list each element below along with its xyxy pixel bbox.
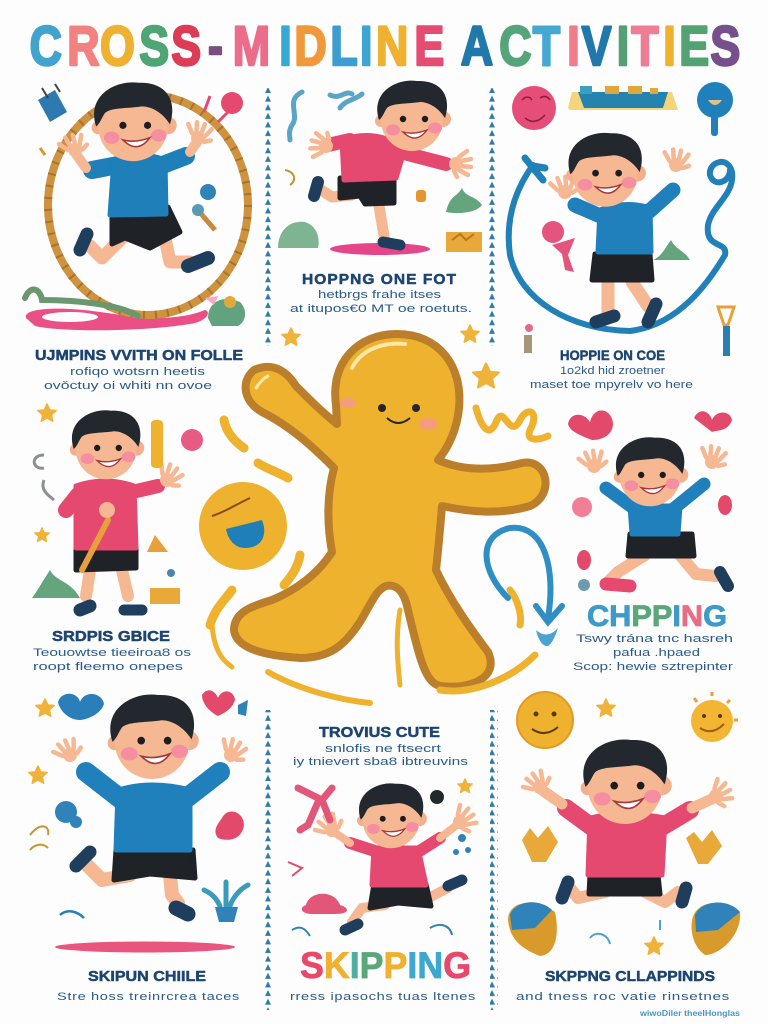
panel: hoppie on coe — [509, 82, 734, 391]
child jumping — [58, 82, 214, 266]
title: S — [139, 14, 169, 77]
hearts and toys — [30, 690, 248, 922]
body — [234, 334, 546, 687]
panel: trovius cute and skipping — [288, 725, 480, 1003]
heading and text: Tswy trána tnc hasreh — [576, 633, 733, 645]
child with raised arms — [51, 695, 249, 914]
hoop rope — [48, 95, 248, 315]
panel: chipping — [486, 411, 733, 673]
rock, box and plant — [278, 170, 482, 252]
child hopping — [309, 81, 471, 245]
heading and text: Stre hoss treinrcrea taces — [57, 991, 240, 1003]
heading and text: Teouowtse tieeiroa8 os — [33, 647, 192, 659]
motion marks — [210, 408, 548, 703]
heading and text: SRDPIS GBICE — [52, 629, 170, 645]
heading and text: snlofis ne ftsecrt — [325, 743, 441, 755]
title: - — [208, 14, 223, 77]
heading and text: 1o2kd hid zroetner — [560, 365, 665, 377]
star icons — [29, 325, 663, 954]
large shoes — [508, 902, 740, 956]
child — [550, 133, 691, 322]
green plant and rock — [25, 290, 245, 326]
panel: skpng cllappinds — [508, 692, 740, 1003]
blue arrow — [486, 528, 562, 622]
title: T — [533, 14, 560, 77]
highlights — [256, 344, 405, 388]
heading and text — [530, 347, 693, 391]
body text: rress ipasochs tuas ltenes — [290, 991, 476, 1003]
title: R — [67, 14, 100, 77]
heading and text: ovǒctuy oi whiti nn ovoe — [44, 380, 212, 392]
pink strip — [55, 942, 235, 952]
toys and plants — [32, 420, 203, 604]
heading and text: at itupos€0 MT oe roetuts. — [290, 303, 472, 315]
panel: hopping one foot — [278, 81, 482, 315]
heading and text: maset toe mpyrelv vo here — [530, 379, 693, 391]
heading and text: and tness roc vatie rinsetnes — [516, 991, 730, 1003]
pink puddle — [26, 309, 208, 330]
toy tray — [568, 86, 678, 110]
heading and text: roopt fleemo onepes — [33, 661, 184, 673]
title: S — [710, 14, 740, 77]
title: E — [679, 14, 709, 77]
child with stick — [66, 410, 186, 610]
title: A — [461, 14, 493, 77]
heading and text: pafua .hpaed — [613, 647, 700, 659]
heading and text: rofiqo wotsrn heetis — [70, 366, 206, 378]
heading and text: Scop: hewie sztrepinter — [573, 661, 733, 673]
yellow faces — [517, 692, 738, 748]
plants — [522, 826, 722, 944]
title: T — [631, 14, 659, 77]
heading and text — [516, 969, 730, 1003]
footer credit: wiwoDiler theelHonglas — [639, 1009, 741, 1018]
small toys — [38, 84, 243, 230]
blue squiggles — [290, 92, 362, 140]
child leaping — [520, 740, 736, 902]
title: C — [499, 14, 532, 77]
heading and text — [35, 348, 243, 392]
title: C — [30, 14, 62, 77]
title: L — [330, 14, 358, 77]
heading and text — [293, 725, 469, 768]
hearts and dots — [568, 411, 732, 591]
heading and text — [33, 629, 192, 673]
child — [578, 437, 728, 586]
panel: jumping with on foile — [25, 82, 248, 392]
heading and text: CHPPING — [587, 600, 727, 633]
title: I — [663, 14, 676, 77]
title: I — [567, 14, 580, 77]
pink bone, hat and dots — [288, 788, 471, 936]
skipping heading: SKIPPING — [300, 945, 471, 986]
face — [340, 398, 437, 430]
blue lollipop — [697, 82, 733, 136]
title: I — [360, 14, 372, 77]
central golden figure — [210, 334, 548, 703]
heading and text: HOPPNG ONE FOT — [302, 271, 457, 288]
title: I — [279, 14, 292, 77]
child skipping — [312, 783, 480, 930]
heading and text — [290, 271, 472, 315]
blue heart icon — [536, 628, 558, 646]
heading and text: iy tnievert sba8 ibtreuvins — [293, 756, 469, 768]
heading and text: HOPPIE ON COE — [560, 347, 665, 363]
heading and text: SKIPUN CHIILE — [88, 969, 206, 985]
title: S — [171, 14, 201, 77]
blue rope — [509, 162, 732, 331]
panel: srdpis gbice — [32, 410, 203, 673]
heading and text: TROVIUS CUTE — [319, 725, 440, 741]
heading and text — [573, 600, 733, 673]
title: D — [294, 14, 327, 77]
title: V — [582, 14, 612, 77]
icon: yellow emoji face — [199, 482, 287, 570]
heading and text: UJMPINS VVITH ON FOLLE — [35, 348, 243, 364]
title: N — [376, 14, 408, 77]
heading and text: hetbrgs frahe itses — [318, 289, 442, 301]
title: I — [617, 14, 629, 77]
pink face toy — [512, 86, 556, 130]
panel: skipun chiile — [30, 690, 249, 1003]
title: E — [414, 14, 444, 77]
heading and text — [57, 969, 240, 1003]
pink blob, bush and tools — [524, 221, 734, 356]
heading and text: SKPPNG CLLAPPINDS — [545, 969, 715, 985]
title: M — [233, 14, 270, 77]
title: O — [100, 14, 135, 77]
